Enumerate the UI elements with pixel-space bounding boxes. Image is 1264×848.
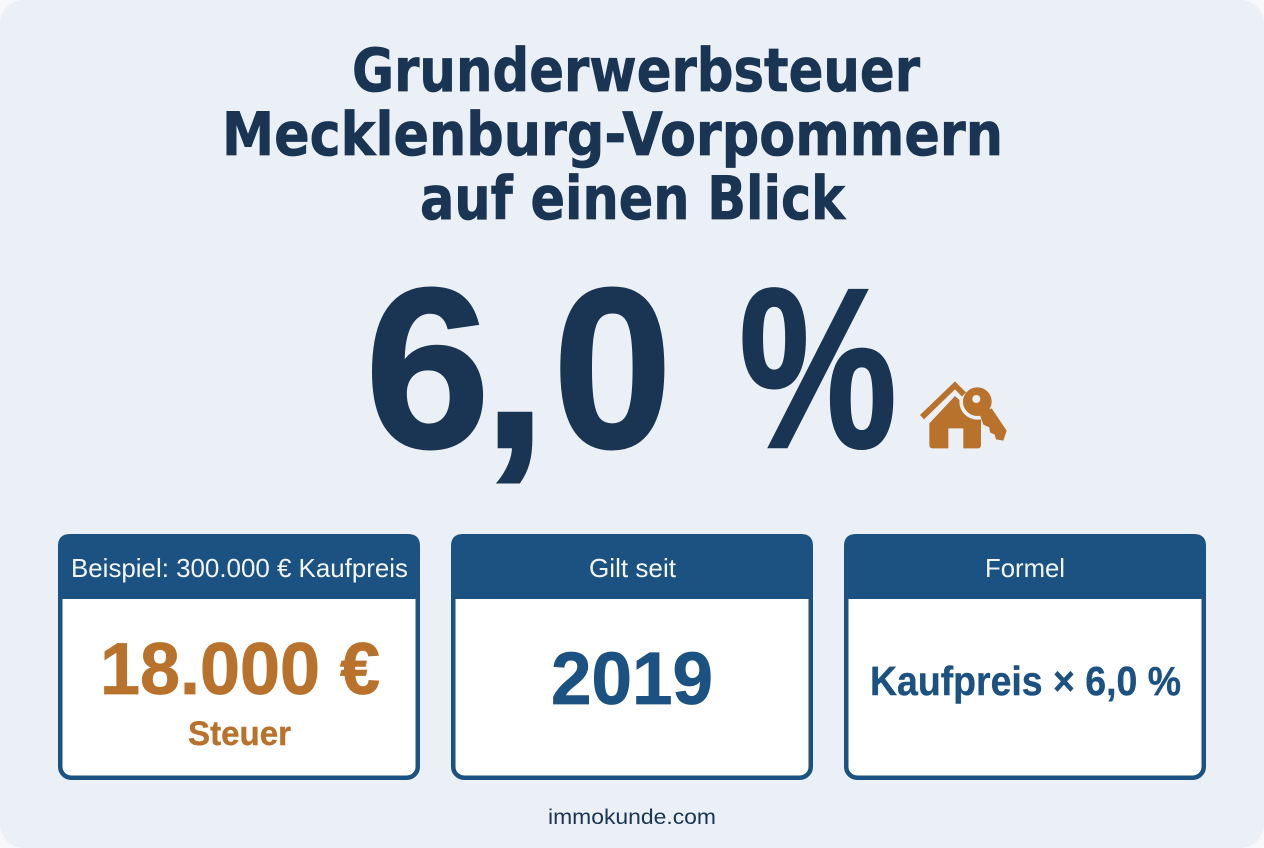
panel: example — [58, 534, 420, 778]
title: Grunderwerbsteuer — [352, 36, 920, 106]
headline rate — [365, 242, 897, 496]
panel: formula — [844, 534, 1206, 778]
headline rate: 6 — [365, 242, 490, 496]
title: Mecklenburg-Vorpommern — [222, 100, 1003, 170]
example caption: Steuer — [188, 715, 291, 753]
headline rate: 0 — [553, 242, 672, 496]
since header label: Gilt seit — [589, 553, 677, 583]
example amount: 18.000 € — [100, 629, 380, 710]
source: immokunde.com — [548, 806, 716, 829]
headline rate: , — [483, 242, 546, 496]
icon: house with key — [920, 381, 1007, 448]
formula header label: Formel — [985, 553, 1065, 583]
formula text: Kaufpreis × 6,0 % — [870, 658, 1181, 704]
title: auf einen Blick — [420, 164, 847, 234]
since year: 2019 — [551, 637, 713, 720]
headline rate: % — [739, 242, 897, 496]
example header label: Beispiel: 300.000 € Kaufpreis — [71, 553, 408, 583]
panel: since — [451, 534, 813, 778]
title — [222, 36, 1003, 234]
